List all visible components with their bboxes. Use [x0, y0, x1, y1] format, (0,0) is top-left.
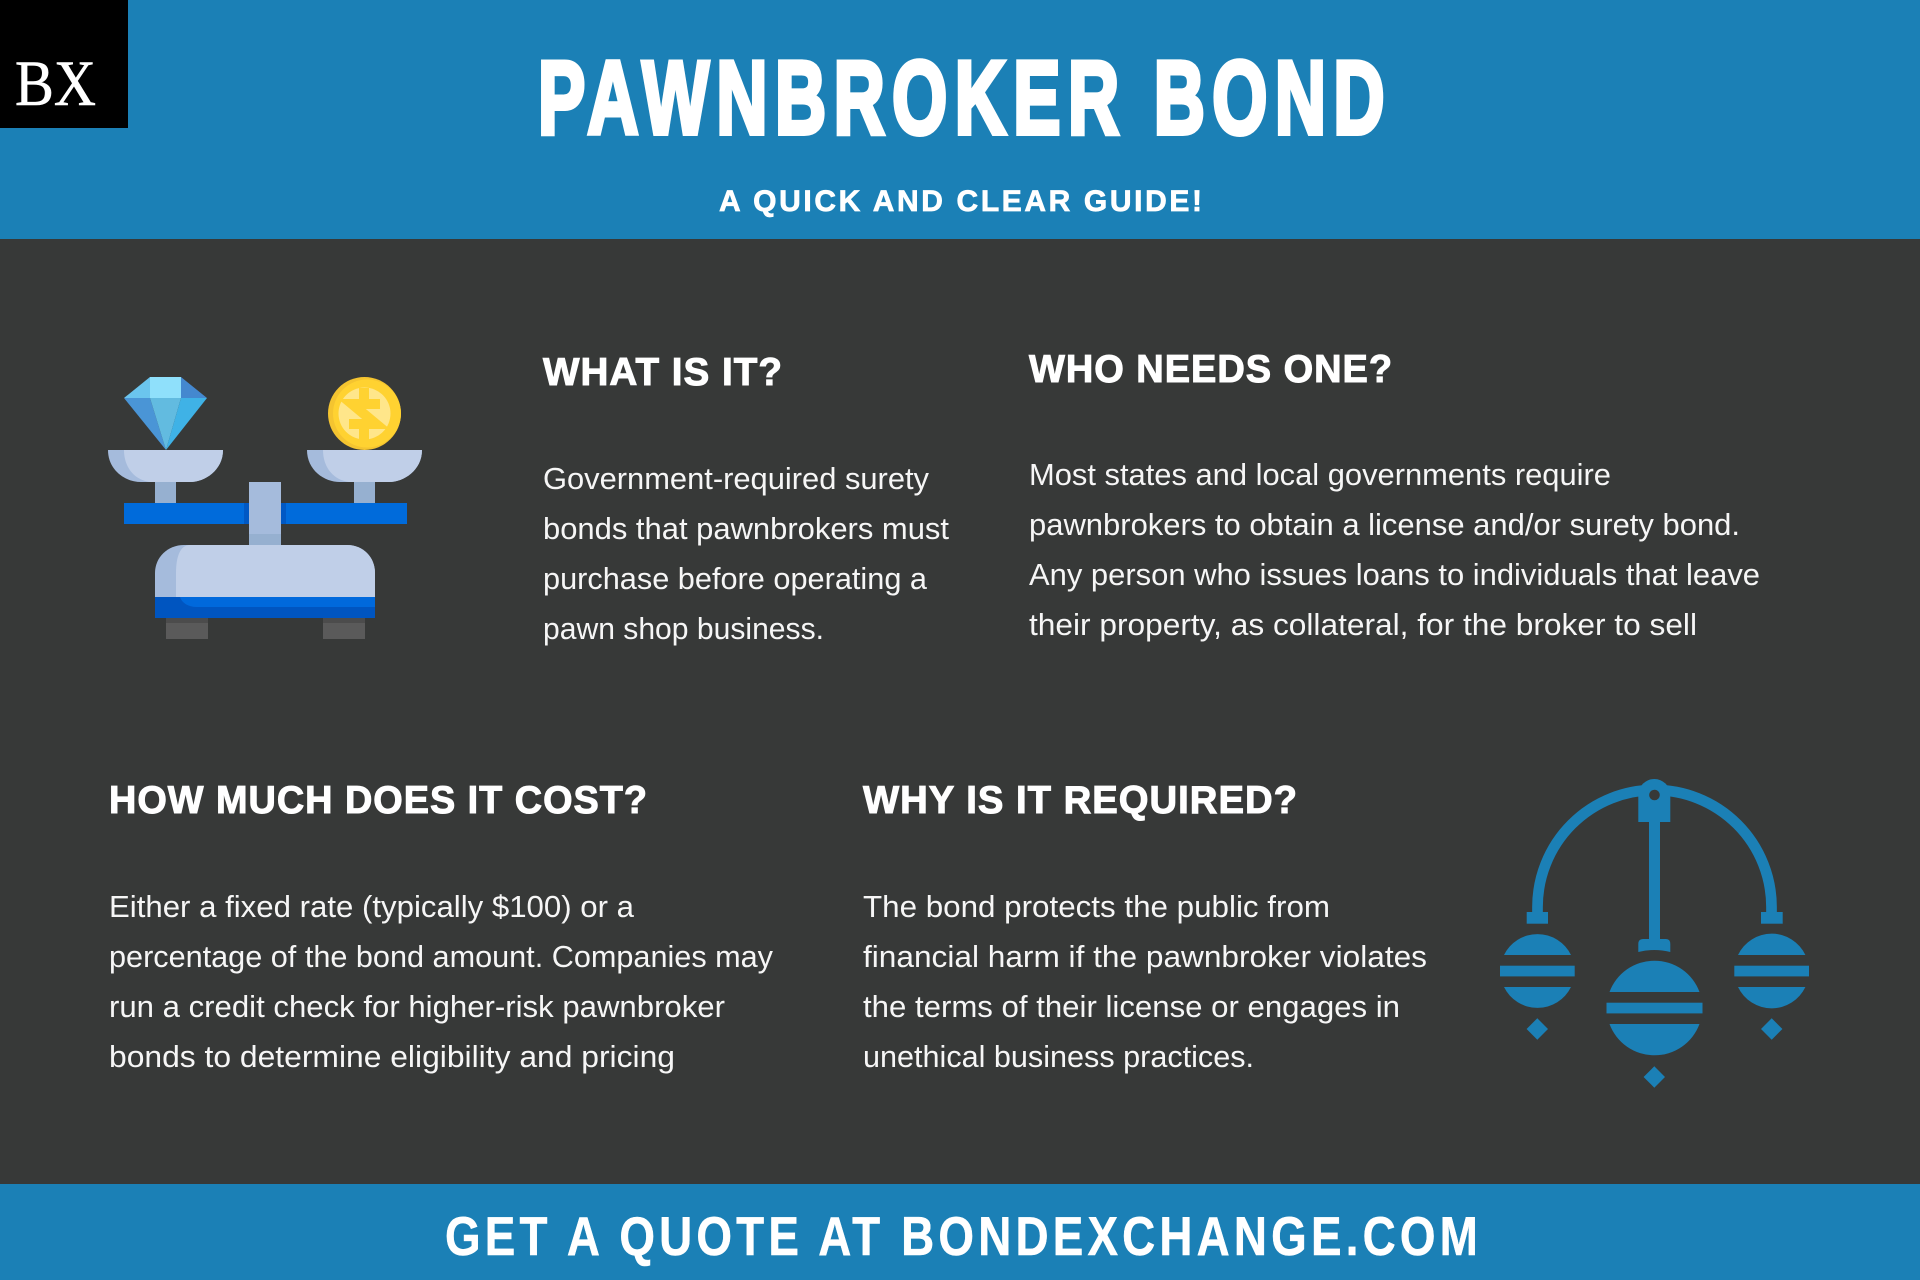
- body: pawn shop business.: [543, 612, 824, 646]
- beam: [124, 503, 407, 524]
- body: bonds to determine eligibility and pricing: [109, 1040, 675, 1074]
- body: pawnbrokers to obtain a license and/or surety bond.: [1029, 508, 1740, 542]
- pivot block: [1638, 779, 1670, 822]
- central stem: [1649, 820, 1660, 941]
- middle ball: [1606, 961, 1702, 1055]
- caps: [1527, 912, 1548, 924]
- left ball: [1500, 934, 1575, 1008]
- body: financial harm if the pawnbroker violates: [863, 940, 1427, 974]
- body: bonds that pawnbrokers must: [543, 512, 950, 546]
- body: [543, 462, 950, 646]
- text block: who needs one: [1029, 348, 1760, 642]
- diamonds: [1527, 1018, 1782, 1088]
- body: Any person who issues loans to individuals that leave: [1029, 558, 1760, 592]
- arc: [1538, 790, 1772, 914]
- body: Most states and local governments require: [1029, 458, 1611, 492]
- body: their property, as collateral, for the broker to sell: [1029, 608, 1697, 642]
- body: run a credit check for higher-risk pawnbroker: [109, 990, 725, 1024]
- feet: [166, 618, 365, 639]
- body: percentage of the bond amount. Companies may: [109, 940, 774, 974]
- body: The bond protects the public from: [863, 890, 1330, 924]
- icon: balance scale with diamond and coin: [108, 377, 422, 639]
- icon: hanging scale weights: [1500, 779, 1809, 1088]
- right bowl: [307, 450, 422, 503]
- body: the terms of their license or engages in: [863, 990, 1400, 1024]
- panel: footer band: [0, 1184, 1920, 1280]
- title: PAWNBROKER BOND: [538, 40, 1392, 156]
- diamond: [124, 377, 207, 450]
- body: unethical business practices.: [863, 1040, 1254, 1074]
- body: purchase before operating a: [543, 562, 927, 596]
- heading: WHO NEEDS ONE?: [1029, 348, 1393, 391]
- body: Government-required surety: [543, 462, 930, 496]
- text block: what is it: [543, 351, 950, 646]
- heading: WHY IS IT REQUIRED?: [863, 779, 1298, 822]
- base: [155, 545, 375, 618]
- text block: how much does it cost: [109, 779, 774, 1074]
- body: [109, 890, 774, 1074]
- logo: BX: [0, 0, 128, 128]
- subtitle: A QUICK AND CLEAR GUIDE!: [719, 185, 1202, 218]
- post: [249, 482, 281, 545]
- body: Either a fixed rate (typically $100) or a: [109, 890, 634, 924]
- body: [1029, 458, 1760, 642]
- heading: WHAT IS IT?: [543, 351, 783, 394]
- left bowl: [108, 450, 223, 503]
- right ball: [1734, 934, 1809, 1008]
- coin: [328, 377, 401, 450]
- text block: why is it required: [863, 779, 1427, 1074]
- panel: header band: [0, 0, 1920, 239]
- body: [863, 890, 1427, 1074]
- footer call to action: GET A QUOTE AT BONDEXCHANGE.COM: [445, 1205, 1482, 1267]
- heading: HOW MUCH DOES IT COST?: [109, 779, 648, 822]
- logo: BX: BX: [15, 48, 96, 120]
